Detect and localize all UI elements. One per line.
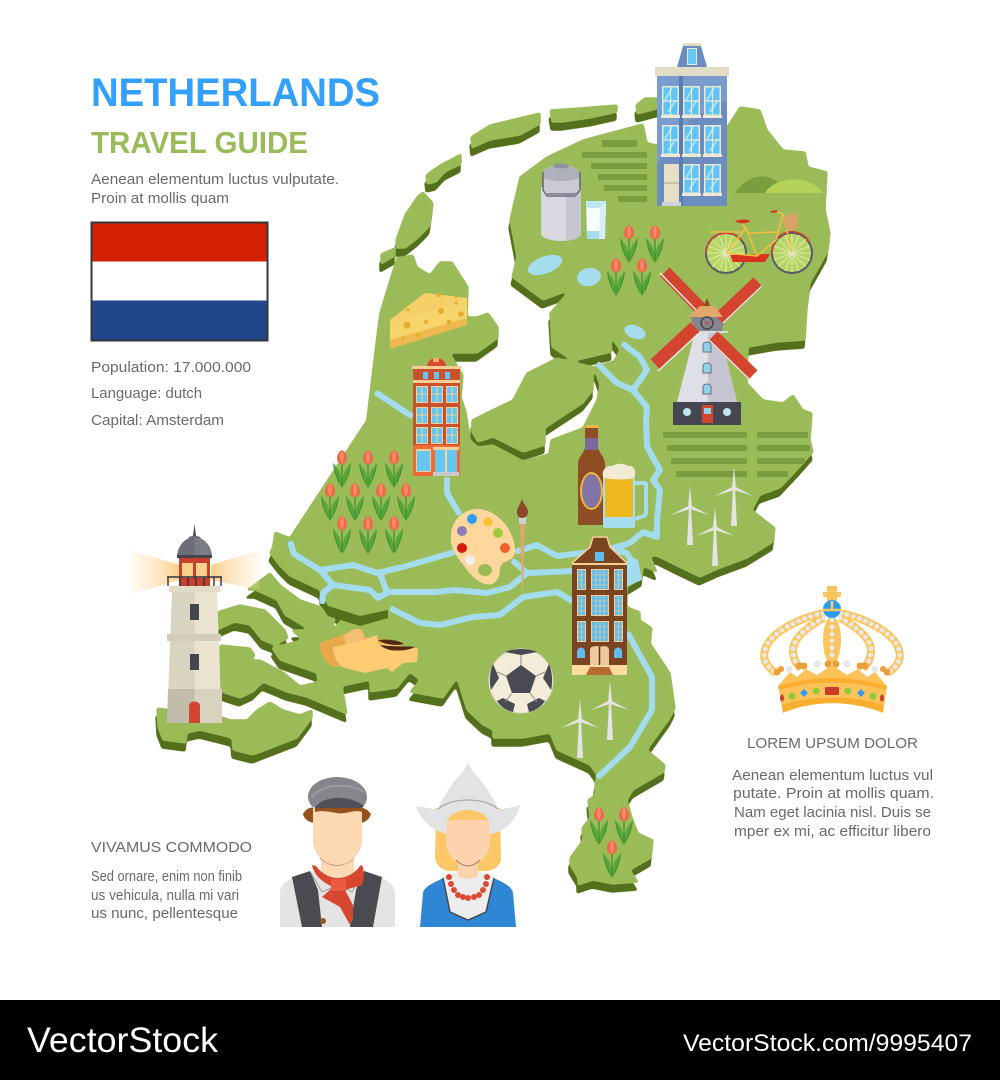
icon: wind turbines east — [671, 467, 753, 566]
icon: royal crown — [764, 586, 900, 713]
text block: lorem upsum dolor: Aenean elementum luctus vul — [732, 768, 933, 784]
country facts: Capital: Amsterdam — [91, 413, 224, 429]
text block: vivamus commodo — [91, 840, 252, 922]
light beams — [130, 550, 260, 594]
icon: beer mug — [603, 464, 646, 528]
icon: beer bottle — [578, 425, 605, 525]
hills — [735, 176, 823, 193]
map extruded edge — [156, 106, 829, 893]
farm fields north — [582, 140, 647, 202]
intro text: Aenean elementum luctus vulputate. — [91, 172, 339, 188]
title: NETHERLANDS — [91, 71, 380, 115]
intro text: Proin at mollis quam — [91, 191, 229, 207]
icon: paint brush — [517, 499, 528, 590]
text block: lorem upsum dolor: putate. Proin at mollis quam. — [733, 786, 934, 802]
icon: tulip field — [321, 450, 415, 554]
icon: blue canal house — [655, 43, 729, 206]
country facts: Language: dutch — [91, 386, 202, 402]
farm fields east — [663, 432, 810, 477]
river mouth — [625, 555, 642, 587]
country facts — [91, 360, 251, 429]
footer bar — [0, 1000, 1000, 1080]
map land surface — [157, 98, 830, 885]
icon: man in traditional dress — [280, 777, 395, 927]
tower — [167, 586, 222, 723]
icon: windmill — [655, 272, 762, 425]
flag of the Netherlands — [90, 222, 268, 342]
icon: lighthouse — [130, 524, 260, 723]
icon: woman in traditional dress — [416, 763, 520, 927]
icon: paint palette — [451, 509, 515, 585]
text block: lorem upsum dolor — [732, 736, 934, 840]
text block: vivamus commodo: us nunc, pellentesque — [91, 906, 238, 922]
icon: orange city hotel — [412, 358, 462, 476]
text block: vivamus commodo: us vehicula, nulla mi vari — [91, 888, 239, 904]
text block: lorem upsum dolor: mper ex mi, ac efficitur libero — [734, 824, 931, 840]
icon: brown canal house — [572, 537, 627, 675]
text block: lorem upsum dolor: LOREM UPSUM DOLOR — [747, 736, 918, 752]
icon: cheese wedge — [390, 293, 467, 349]
text block: vivamus commodo: Sed ornare, enim non finib — [91, 869, 242, 885]
footer logo: VectorStock — [27, 1021, 219, 1060]
icon: wind turbines south — [561, 681, 629, 758]
rivers — [290, 343, 660, 778]
icon: tulips south — [590, 807, 633, 878]
lamp room — [167, 524, 222, 586]
footer url: VectorStock.com/9995407 — [683, 1030, 972, 1057]
text block: lorem upsum dolor: Nam eget lacinia nisl. Duis se — [734, 805, 931, 821]
text block: vivamus commodo: VIVAMUS COMMODO — [91, 840, 252, 856]
icon: bicycle — [706, 211, 812, 273]
icon: soccer ball — [489, 649, 553, 713]
inner coastline — [320, 596, 388, 626]
map of the Netherlands — [156, 98, 830, 893]
ponds — [525, 251, 648, 342]
icon: wooden clogs — [320, 629, 418, 673]
country facts: Population: 17.000.000 — [91, 360, 251, 376]
intro text — [91, 172, 339, 207]
icon: milk can and glass — [541, 164, 606, 241]
icon: tulips north — [607, 225, 664, 296]
subtitle: TRAVEL GUIDE — [91, 125, 308, 160]
